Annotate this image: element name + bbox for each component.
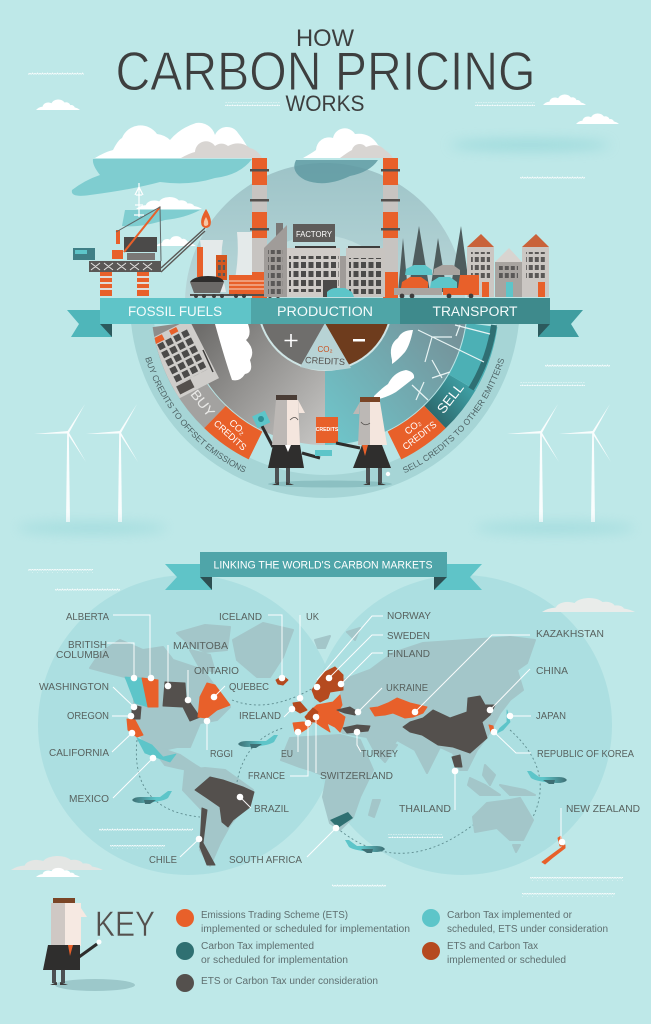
map heading ribbon bbox=[165, 552, 482, 590]
map country labels: SWITZERLAND bbox=[320, 770, 393, 782]
map country labels: ONTARIO bbox=[194, 665, 239, 677]
CO2 credits left tag bbox=[211, 410, 256, 453]
key item: carbon tax implemented: or scheduled for implementation bbox=[201, 955, 348, 966]
Europe policy regions bbox=[293, 667, 370, 733]
oil rig bbox=[73, 183, 211, 296]
chimney left bbox=[250, 158, 269, 298]
map country labels: BRITISH bbox=[68, 639, 107, 651]
Iceland bbox=[276, 676, 288, 685]
map country labels: JAPAN bbox=[536, 710, 566, 722]
map country labels: UKRAINE bbox=[386, 682, 428, 694]
car outside the factory bbox=[327, 288, 354, 297]
CO2 credits pie label: CREDITS bbox=[305, 355, 345, 367]
second cloud bbox=[294, 128, 393, 183]
flight paths bbox=[136, 685, 540, 853]
map country labels: RGGI bbox=[210, 748, 233, 760]
lower disc left: buy half bbox=[192, 324, 325, 445]
map country labels: ALBERTA bbox=[66, 611, 109, 623]
large left cloud bbox=[72, 123, 262, 196]
factory sign bbox=[293, 224, 335, 242]
CO2 credits right tag bbox=[394, 411, 439, 453]
map country labels: REPUBLIC OF KOREA bbox=[537, 748, 634, 760]
North America policy regions bbox=[125, 677, 230, 762]
buy ring segments bbox=[168, 325, 256, 446]
map country labels: CHINA bbox=[536, 665, 568, 677]
map country labels: TURKEY bbox=[361, 748, 398, 760]
outer lower ring bbox=[131, 324, 519, 498]
ribbon label production: PRODUCTION bbox=[277, 304, 373, 319]
key item: carbon tax implemented bbox=[176, 941, 348, 966]
CO2 credits right tag: CO₂ bbox=[403, 417, 424, 437]
factory bbox=[264, 223, 385, 297]
map waves bbox=[99, 828, 443, 849]
ribbon label transport: TRANSPORT bbox=[432, 304, 518, 319]
map country labels: QUEBEC bbox=[229, 681, 269, 693]
wind turbines inside disc bbox=[412, 325, 490, 400]
buyer figure bbox=[252, 395, 332, 485]
key item: ETS and carbon tax: implemented or scheduled bbox=[447, 955, 566, 966]
CO2 credits left tag: CO₂ bbox=[227, 418, 248, 438]
ribbon label fossil fuels: FOSSIL FUELS bbox=[128, 304, 222, 319]
key item: emissions trading scheme: implemented or scheduled for implementation bbox=[201, 924, 410, 935]
map country labels: NEW ZEALAND bbox=[566, 803, 640, 815]
map country labels: IRELAND bbox=[239, 710, 281, 722]
key item: carbon tax, ETS under consideration: scheduled, ETS under consideration bbox=[447, 924, 608, 935]
sector ribbon bbox=[67, 298, 583, 337]
factory sign: FACTORY bbox=[296, 229, 332, 239]
seller figure bbox=[336, 397, 391, 485]
map country labels: COLUMBIA bbox=[56, 649, 109, 661]
key item: emissions trading scheme bbox=[176, 909, 410, 935]
small clouds behind the oil rig bbox=[122, 197, 202, 246]
key item: under consideration bbox=[176, 974, 378, 992]
trees bbox=[398, 226, 470, 292]
clouds on map bbox=[11, 598, 635, 877]
map country labels: MEXICO bbox=[69, 793, 109, 805]
map country labels: NORWAY bbox=[387, 610, 431, 622]
central credits pie bbox=[260, 324, 390, 371]
coal train bbox=[190, 247, 286, 298]
buy label: BUY bbox=[187, 387, 218, 420]
map heading ribbon: LINKING THE WORLD'S CARBON MARKETS bbox=[214, 560, 432, 572]
minus sign bbox=[353, 339, 365, 342]
South America policy regions bbox=[195, 777, 254, 865]
planes bbox=[132, 735, 567, 853]
white clouds inside disc bbox=[215, 324, 414, 400]
sell label: SELL bbox=[434, 380, 467, 416]
map country labels: BRAZIL bbox=[254, 803, 289, 815]
CO2 credits pie label: CO₂ bbox=[317, 345, 333, 354]
wind turbines right bbox=[507, 404, 611, 522]
map country labels: KAZAKHSTAN bbox=[536, 628, 604, 640]
CO2 credits right tag: CREDITS bbox=[401, 419, 439, 453]
key item: carbon tax, ETS under consideration: Carbon Tax implemented or bbox=[447, 910, 573, 921]
credits box bbox=[316, 417, 339, 443]
South Africa bbox=[330, 812, 353, 828]
leader lines bbox=[107, 615, 561, 857]
key heading: KEY bbox=[95, 905, 155, 944]
globes bbox=[38, 575, 612, 875]
map country labels: CALIFORNIA bbox=[49, 747, 109, 759]
credits box: CREDITS bbox=[316, 427, 339, 433]
map country labels: SWEDEN bbox=[387, 630, 430, 642]
calculator bbox=[154, 324, 219, 398]
title: WORKS bbox=[286, 91, 364, 116]
title: HOW bbox=[296, 25, 354, 52]
map country labels: FRANCE bbox=[248, 770, 285, 782]
blurred cloud shadow right bbox=[450, 139, 610, 151]
CO2 credits pie label bbox=[305, 345, 345, 367]
key item: emissions trading scheme: Emissions Trading Scheme (ETS) bbox=[201, 910, 348, 921]
map country labels: THAILAND bbox=[399, 803, 451, 815]
key item: carbon tax, ETS under consideration bbox=[422, 909, 608, 935]
map country labels: EU bbox=[281, 748, 293, 760]
location dots bbox=[128, 675, 565, 845]
decorative wave lines bbox=[28, 71, 623, 897]
title: CARBON PRICING bbox=[116, 40, 536, 102]
plus sign bbox=[284, 334, 298, 347]
map country labels: FINLAND bbox=[387, 648, 430, 660]
map country labels: ICELAND bbox=[219, 611, 262, 623]
lower disc right: sell half bbox=[325, 324, 466, 445]
map country labels: MANITOBA bbox=[173, 640, 228, 652]
world map landmasses bbox=[90, 623, 535, 866]
New Zealand bbox=[542, 836, 565, 864]
Asia policy regions bbox=[370, 696, 510, 767]
wind turbines left bbox=[34, 404, 138, 522]
inner lower band bbox=[154, 324, 496, 475]
map country labels bbox=[39, 610, 640, 866]
map country labels: UK bbox=[306, 611, 319, 623]
key figure bbox=[43, 898, 135, 991]
curved caption buy: BUY CREDITS TO OFFSET EMISSIONS bbox=[145, 356, 246, 472]
map country labels: CHILE bbox=[149, 854, 177, 866]
ground shadow under figures bbox=[268, 480, 392, 488]
CO2 credits left tag: CREDITS bbox=[211, 418, 248, 453]
key item: carbon tax implemented: Carbon Tax implemented bbox=[201, 941, 314, 952]
houses bbox=[467, 234, 549, 297]
map country labels: OREGON bbox=[67, 710, 109, 722]
chimney right bbox=[381, 158, 400, 298]
title bbox=[116, 25, 536, 116]
key item: ETS and carbon tax: ETS and Carbon Tax bbox=[447, 941, 538, 952]
dome behind the factory bbox=[185, 166, 465, 298]
key item: ETS and carbon tax bbox=[422, 941, 566, 966]
cooling towers bbox=[196, 232, 252, 292]
map country labels: WASHINGTON bbox=[39, 681, 109, 693]
small clouds in sky bbox=[36, 94, 619, 124]
curved caption sell: SELL CREDITS TO OTHER EMITTERS bbox=[403, 358, 504, 473]
car transporter bbox=[394, 265, 479, 298]
sell ring segments bbox=[394, 325, 494, 446]
map country labels: SOUTH AFRICA bbox=[229, 854, 302, 866]
blurred water shadows bbox=[17, 522, 635, 534]
key item: under consideration: ETS or Carbon Tax under consideration bbox=[201, 976, 378, 987]
